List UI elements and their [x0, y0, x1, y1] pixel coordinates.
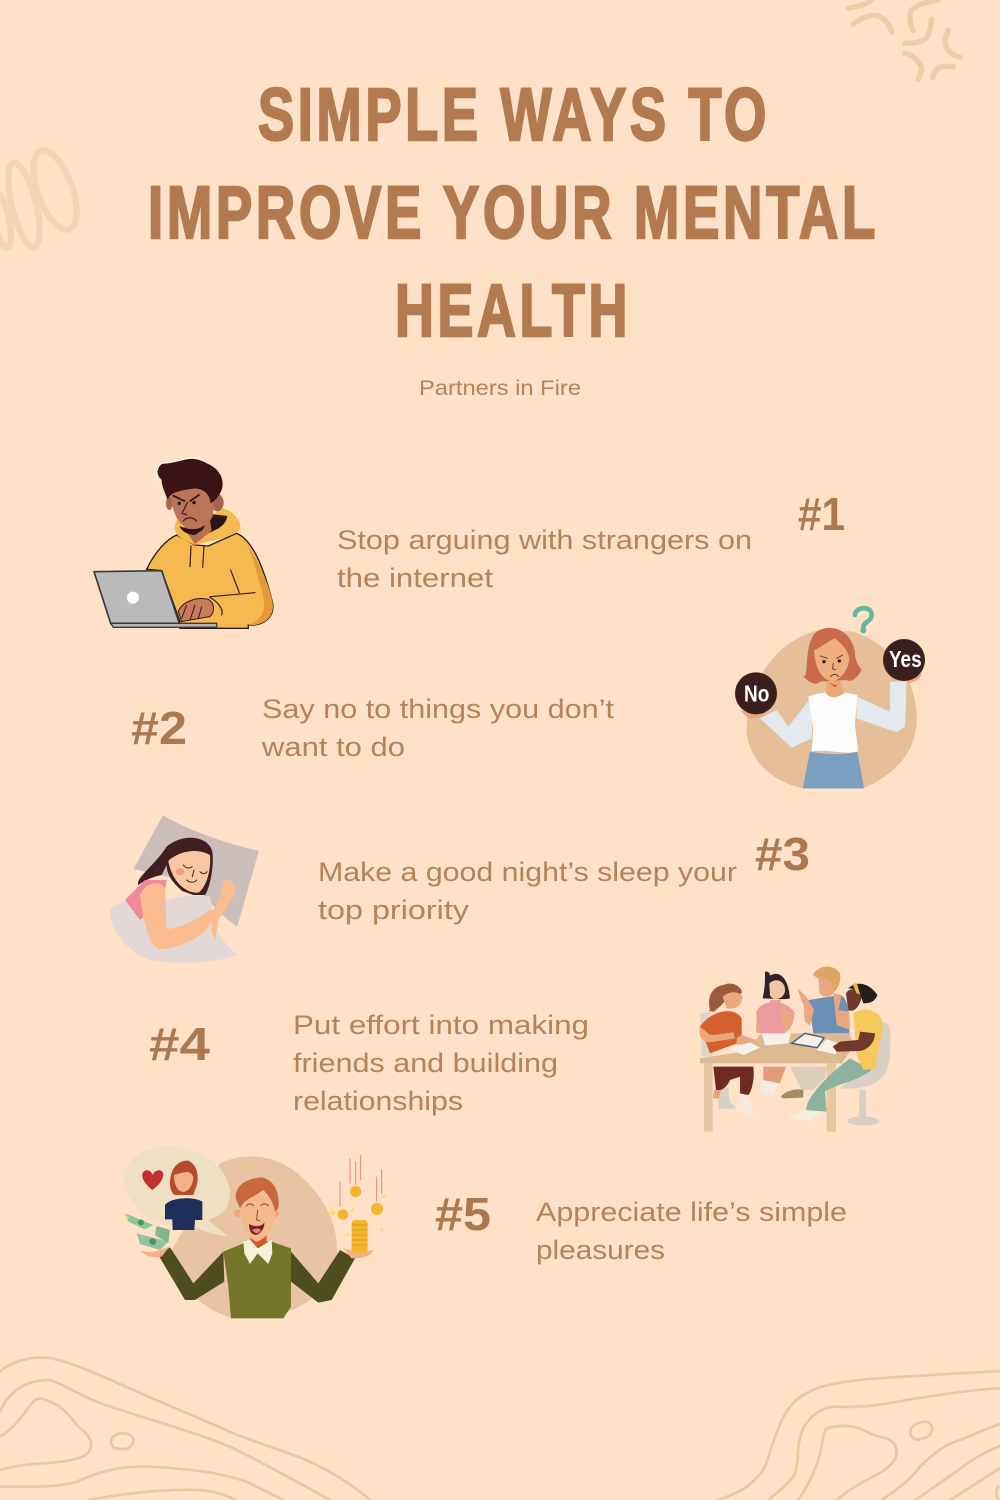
tip 4 [149, 967, 891, 1132]
icon: four friends at a table [699, 967, 891, 1132]
icon: angry man at laptop [94, 458, 273, 628]
number 4: #4 [149, 1018, 210, 1070]
decoration: top right squiggles [848, 0, 960, 79]
tip 2 [131, 608, 925, 788]
no ball [735, 672, 777, 714]
tip text 5: pleasures [536, 1235, 665, 1265]
tip text 2: Say no to things you don’t [262, 694, 615, 724]
yes ball [883, 639, 925, 681]
decoration: left scribble [0, 145, 86, 250]
yes ball: Yes [889, 646, 922, 672]
coins [124, 1155, 387, 1253]
subtitle: Partners in Fire [419, 377, 581, 400]
tip text 1: Stop arguing with strangers on [337, 525, 752, 555]
title: SIMPLE WAYS TO [258, 73, 770, 156]
tip text 5: Appreciate life’s simple [536, 1197, 847, 1227]
icon: woman sleeping [110, 817, 258, 963]
tip text 4: relationships [293, 1086, 463, 1116]
title: HEALTH [395, 269, 631, 352]
tip 5 [123, 1147, 847, 1318]
tip text 2 [261, 694, 615, 762]
tip text 1: the internet [337, 563, 494, 593]
tip text 5 [536, 1197, 847, 1265]
tip text 4: friends and building [293, 1048, 558, 1078]
tip text 3 [318, 857, 737, 925]
tip 1 [94, 458, 845, 628]
tip text 3: Make a good night’s sleep your [318, 857, 737, 887]
number 3: #3 [755, 828, 810, 880]
tip text 3: top priority [318, 895, 470, 925]
tip text 1 [337, 525, 752, 593]
icon: happy man with money, coins and love [123, 1147, 387, 1318]
decoration: bottom right contour lines [718, 1371, 1000, 1500]
tip 3 [110, 817, 810, 963]
icon: woman choosing yes or no [735, 608, 925, 788]
decoration: bottom left contour lines [0, 1358, 370, 1500]
number 2: #2 [131, 702, 187, 754]
tip text 2: want to do [261, 732, 405, 762]
tip text 4 [293, 1010, 589, 1116]
number 5: #5 [435, 1188, 491, 1240]
no ball: No [744, 681, 769, 707]
number 1: #1 [798, 488, 845, 540]
tip text 4: Put effort into making [293, 1010, 589, 1040]
title [148, 73, 879, 352]
